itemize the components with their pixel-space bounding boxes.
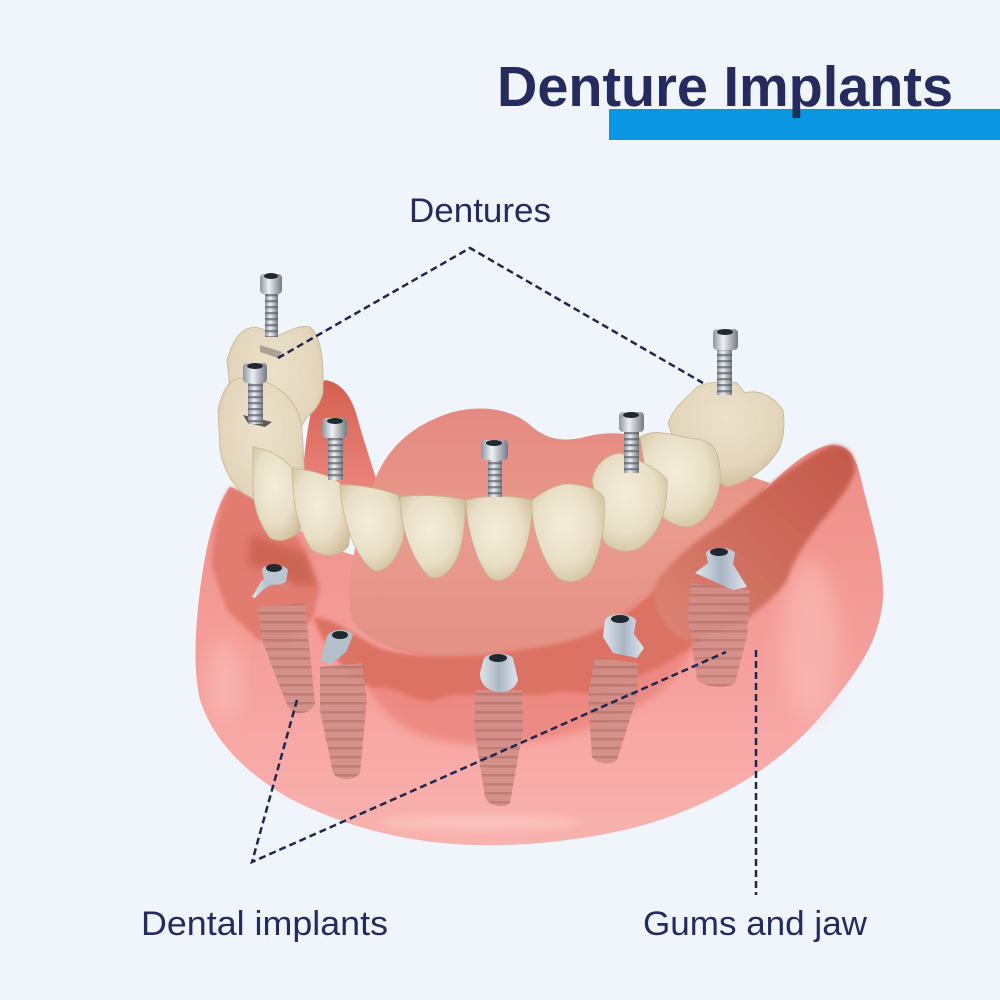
dentures (218, 327, 784, 582)
leader lines: dental implants (252, 652, 726, 862)
title accent bar (609, 109, 1000, 140)
screw 2 (243, 363, 267, 424)
grey access hole (243, 415, 272, 427)
right inner gum (653, 445, 855, 640)
dental implants (252, 548, 750, 806)
gums and jaw (195, 445, 883, 845)
dental illustration (195, 273, 883, 845)
screw 5 (619, 412, 644, 473)
incisor 3 (466, 496, 532, 580)
screw 1 (260, 273, 282, 337)
right second tooth (640, 433, 720, 527)
left inner gum (212, 487, 320, 643)
tooth left 3 (253, 447, 301, 540)
implant 1 (252, 564, 315, 713)
incisor 2 (400, 496, 465, 578)
screw 3 (322, 418, 347, 480)
leader lines: dentures (278, 248, 703, 383)
incisor 4 (532, 484, 604, 582)
gum highlights (211, 640, 239, 720)
label: dentures: Dentures (409, 192, 551, 230)
scalloped gum ridge (313, 575, 700, 702)
implant 2 (320, 630, 367, 779)
left second molar (218, 378, 305, 525)
leader line: gums and jaw (755, 650, 757, 895)
left back molar (227, 327, 323, 460)
under-tongue shadow (360, 630, 700, 745)
screw 4 (481, 440, 508, 497)
grey wear patch (260, 345, 282, 358)
tongue (349, 408, 770, 656)
tooth left 4 (292, 468, 349, 555)
rear left gum (300, 380, 378, 525)
title: Denture Implants (497, 55, 953, 119)
right back molar (668, 382, 784, 487)
implant 5 (688, 548, 750, 687)
label: dental implants: Dental implants (141, 905, 388, 943)
implant 3 (474, 654, 523, 806)
premolar right (592, 453, 667, 551)
incisor 1 (340, 485, 404, 571)
screw 6 (713, 329, 738, 395)
implant 4 (588, 614, 644, 763)
label: gums and jaw: Gums and jaw (643, 905, 867, 943)
retaining screws (243, 273, 738, 497)
